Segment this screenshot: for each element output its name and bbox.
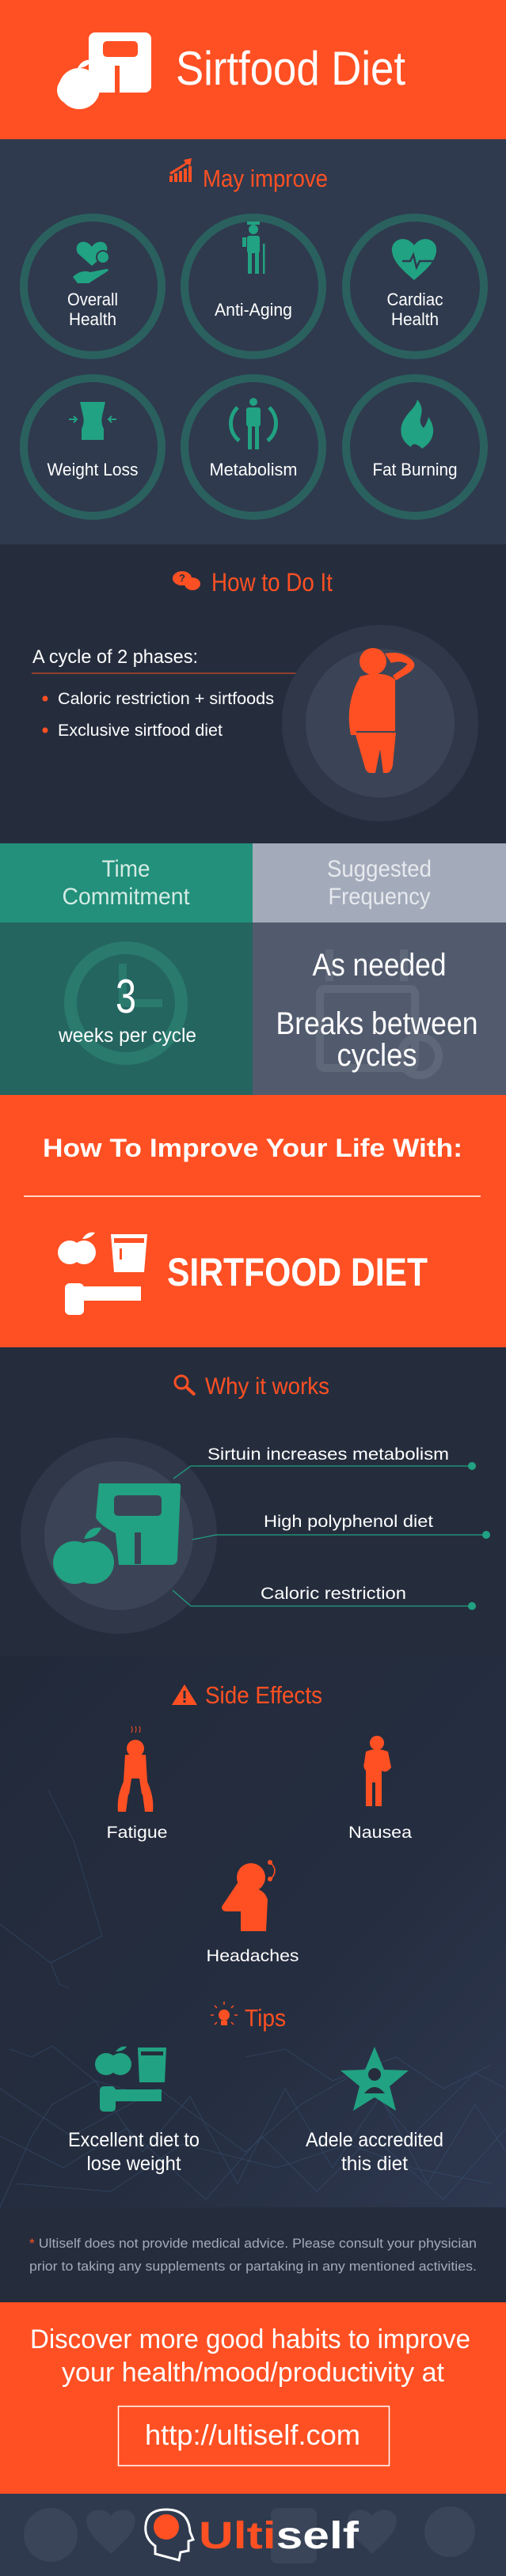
icon: faint clock <box>70 948 181 1059</box>
panel: may improve <box>0 139 506 544</box>
benefit: weight loss: Weight Loss <box>48 460 138 479</box>
text: cycle phases: A cycle of 2 phases: <box>32 646 198 668</box>
heading: side effects: Side Effects <box>205 1681 322 1709</box>
benefit: metabolism: Metabolism <box>209 460 298 479</box>
heading: how to do it <box>173 568 333 597</box>
panel: time commitment: Time <box>101 856 150 882</box>
benefit: anti-aging: Anti-Aging <box>215 300 292 320</box>
benefit: anti-aging <box>185 218 322 355</box>
benefit: overall health <box>24 218 162 355</box>
header banner <box>0 0 506 139</box>
panel: why it works <box>0 1347 506 1656</box>
footer: logo <box>0 2494 506 2576</box>
panel: time commitment <box>0 843 253 1095</box>
text: cycle phases <box>32 646 307 740</box>
callout: polyphenol: High polyphenol diet <box>264 1513 433 1531</box>
panel: how to do it <box>0 544 506 843</box>
disclaimer <box>0 2207 506 2302</box>
benefit: overall health: Health <box>69 309 116 329</box>
disclaimer: prior to taking any supplements or partaking in any mentioned activities. <box>29 2259 477 2274</box>
panel: call to action <box>0 2302 506 2494</box>
text: cycle phases: Caloric restriction + sirtfoods <box>58 690 274 708</box>
side effect: fatigue <box>106 1726 168 1842</box>
panel: call to action: your health/mood/productivity at <box>62 2358 445 2388</box>
callout: caloric restriction: Caloric restriction <box>261 1585 406 1603</box>
heading: how to do it: ? <box>179 572 185 584</box>
heading: may improve <box>169 158 328 192</box>
benefit: fat burning <box>346 378 484 516</box>
side effect: nausea <box>348 1736 412 1842</box>
panel: side effects and tips <box>0 1656 506 2207</box>
title: Sirtfood Diet <box>176 42 405 95</box>
callout: caloric restriction <box>173 1585 476 1610</box>
callout: polyphenol <box>192 1513 490 1540</box>
panel: time commitment: Commitment <box>62 884 190 910</box>
icon: brain logo <box>146 2510 193 2560</box>
side effect: headaches: Headaches <box>206 1947 299 1965</box>
side effect: headaches <box>206 1860 299 1965</box>
side effect: nausea: Nausea <box>348 1824 412 1842</box>
illustration: confused figure <box>282 625 478 821</box>
tip: adele <box>306 2047 443 2175</box>
panel: how to improve banner: How To Improve Your Life With: <box>43 1134 462 1162</box>
footer: logo: Ulti self <box>199 2515 360 2557</box>
icon: faint calendar <box>320 949 439 1075</box>
heading: tips <box>211 2002 286 2032</box>
panel: time commitment: 3 <box>116 970 136 1023</box>
benefit: weight loss <box>24 378 162 516</box>
panel: suggested frequency: Suggested <box>327 856 432 882</box>
panel: suggested frequency: As needed <box>312 948 447 983</box>
panel: call to action: Discover more good habits to improve <box>30 2324 470 2354</box>
benefit: cardiac health: Health <box>391 309 439 329</box>
tip: excellent diet <box>68 2047 200 2175</box>
text: cycle phases: Exclusive sirtfood diet <box>58 722 223 740</box>
icon: apple, scale, tape <box>58 1233 147 1315</box>
benefit: metabolism <box>185 378 322 516</box>
benefit: overall health: Overall <box>67 290 118 309</box>
callout: sirtuin: Sirtuin increases metabolism <box>207 1445 449 1464</box>
benefit: fat burning: Fat Burning <box>372 460 458 479</box>
benefit: cardiac health <box>346 218 484 355</box>
url button: http://ultiself.com <box>145 2419 360 2451</box>
panel: time commitment: weeks per cycle <box>58 1025 196 1047</box>
heading: may improve: May improve <box>203 165 328 192</box>
benefit: cardiac health: Cardiac <box>386 290 443 309</box>
callout: sirtuin <box>173 1445 476 1479</box>
panel: suggested frequency: Breaks between <box>276 1006 478 1041</box>
heading: tips: Tips <box>245 2004 286 2032</box>
panel: suggested frequency <box>253 843 506 1095</box>
panel: suggested frequency: Frequency <box>328 884 431 910</box>
side effect: fatigue: Fatigue <box>106 1824 168 1842</box>
panel: how to improve banner <box>0 1095 506 1347</box>
tip: adele: Adele accredited <box>306 2129 443 2151</box>
heading: why it works: Why it works <box>205 1373 329 1400</box>
disclaimer: * Ultiself does not provide medical advice. Please consult your physician <box>29 2236 477 2251</box>
tip: excellent diet: Excellent diet to <box>68 2129 200 2151</box>
panel: how to improve banner: SIRTFOOD DIET <box>167 1250 428 1294</box>
tip: excellent diet: lose weight <box>87 2153 181 2175</box>
heading: how to do it: How to Do It <box>211 568 333 597</box>
illustration: apple and scale <box>21 1438 217 1634</box>
tip: adele: this diet <box>341 2153 408 2175</box>
icon: apple and scale <box>57 32 151 109</box>
panel: suggested frequency: cycles <box>337 1038 417 1073</box>
url button <box>119 2407 390 2465</box>
